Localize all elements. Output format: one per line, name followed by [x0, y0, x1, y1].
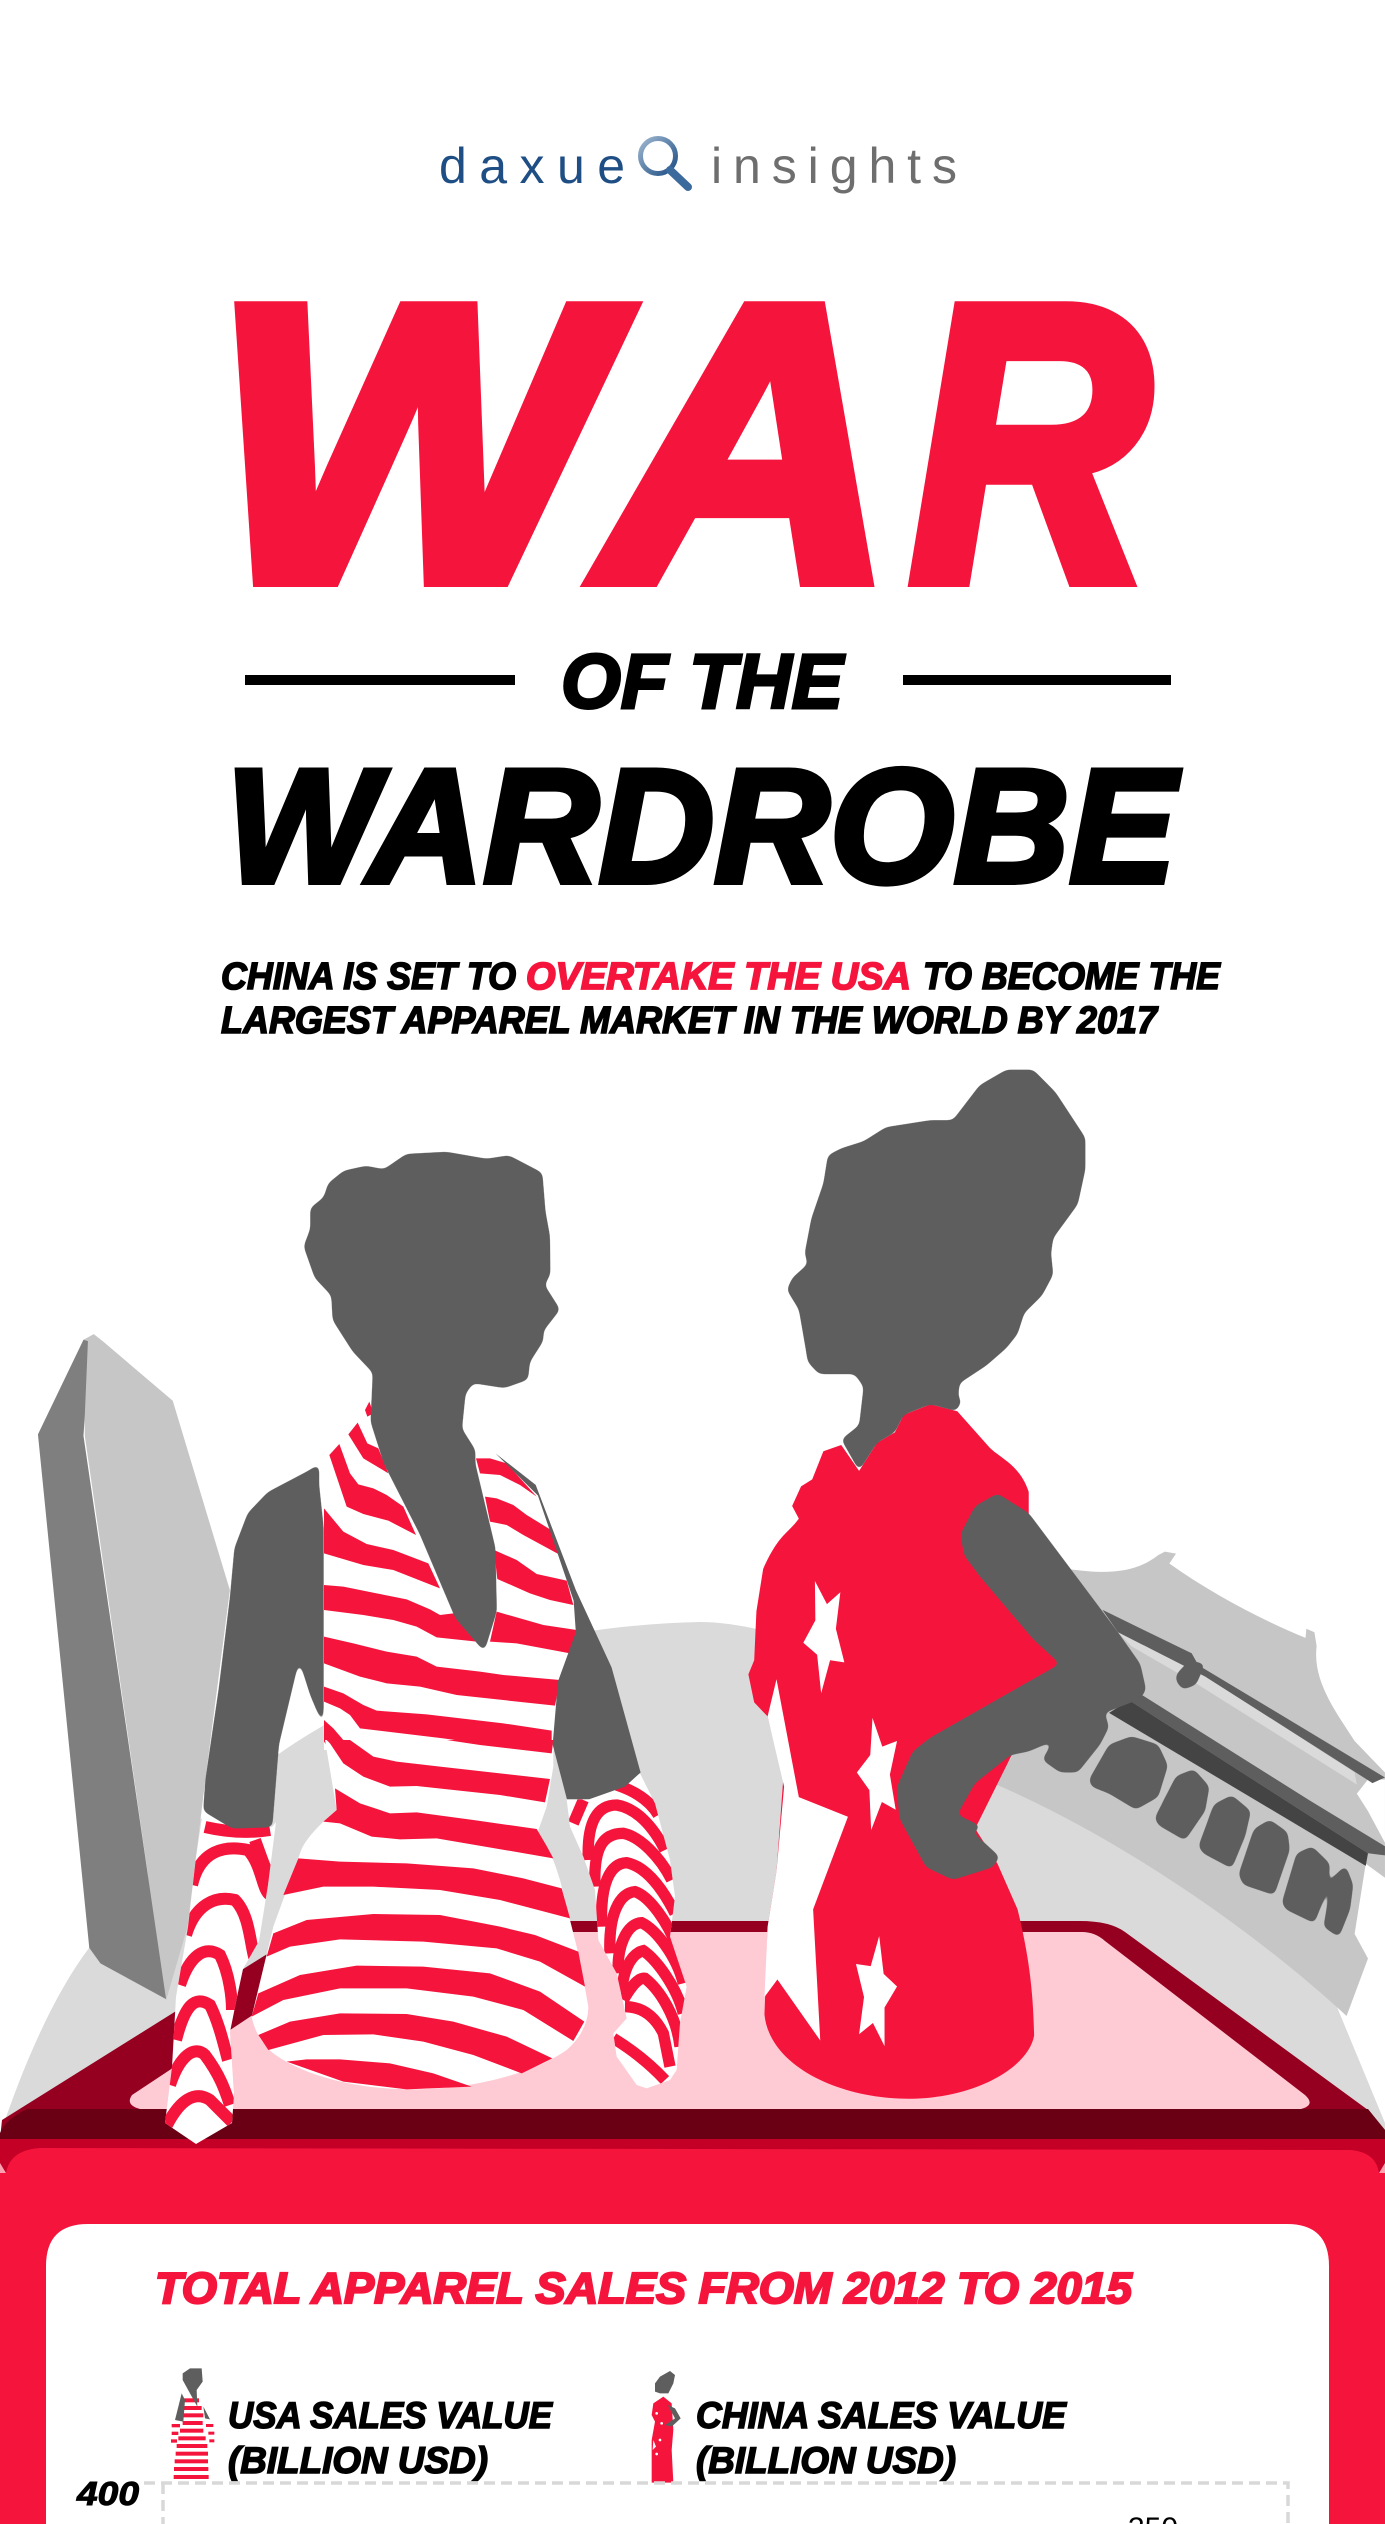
tagline: CHINA IS SET TO [221, 956, 516, 998]
legend label: China: CHINA SALES VALUE [696, 2395, 1067, 2436]
tagline: OVERTAKE THE USA [526, 956, 911, 998]
tagline: TO BECOME THE [923, 956, 1222, 998]
figure: China woman in star dress [748, 1070, 1146, 2099]
logo: daxue insights [439, 138, 957, 194]
legend icon: China figure [652, 2371, 681, 2483]
legend icon: USA figure [171, 2368, 214, 2479]
legend label: China: (BILLION USD) [696, 2440, 956, 2481]
icon: magnifying glass [640, 138, 688, 187]
logo: daxue insights: daxue [439, 138, 625, 194]
USA right forearm [567, 1773, 687, 2088]
legend label: USA [228, 2395, 553, 2481]
figure: USA woman in striped dress [165, 1152, 687, 2144]
tagline [221, 956, 1222, 1042]
USA head, neck and arms silhouette [203, 1152, 641, 1829]
China dress [748, 1404, 1058, 2099]
panel: total apparel sales [46, 2224, 1329, 2524]
title: WAR: R [910, 225, 1150, 663]
chart: axis label 400: 400 [76, 2475, 140, 2512]
subtitle line: OF THE with rules: OF THE [561, 639, 846, 725]
title: WARDROBE: WARDROBE [226, 736, 1181, 917]
USA dress torso [320, 1402, 577, 1750]
logo: daxue insights: insights [711, 138, 957, 194]
USA dress skirt [252, 1740, 588, 2089]
red panel background [0, 2139, 1385, 2524]
building: tiananmen roof and windows [993, 1552, 1385, 2016]
tagline: LARGEST APPAREL MARKET IN THE WORLD BY 2017 [221, 1000, 1159, 1042]
China dress stars [764, 1581, 897, 2046]
illustration background: dome [0, 1622, 1385, 2145]
legend label: China [696, 2395, 1067, 2481]
legend label: USA: (BILLION USD) [228, 2440, 488, 2481]
building: monitor-shaped monument [38, 1334, 230, 2001]
title: WAR: A [589, 225, 894, 663]
subtitle line: OF THE with rules [245, 639, 1171, 725]
China head and arm silhouette [787, 1070, 1146, 1880]
legend label: USA: USA SALES VALUE [228, 2395, 553, 2436]
panel heading: TOTAL APPAREL SALES FROM 2012 TO 2015 [155, 2264, 1133, 2313]
USA left forearm [165, 1811, 276, 2144]
title: WAR: W [213, 225, 630, 663]
table [0, 1921, 1385, 2139]
chart: dashed frame [144, 2483, 1288, 2524]
title: WAR [213, 225, 1150, 663]
